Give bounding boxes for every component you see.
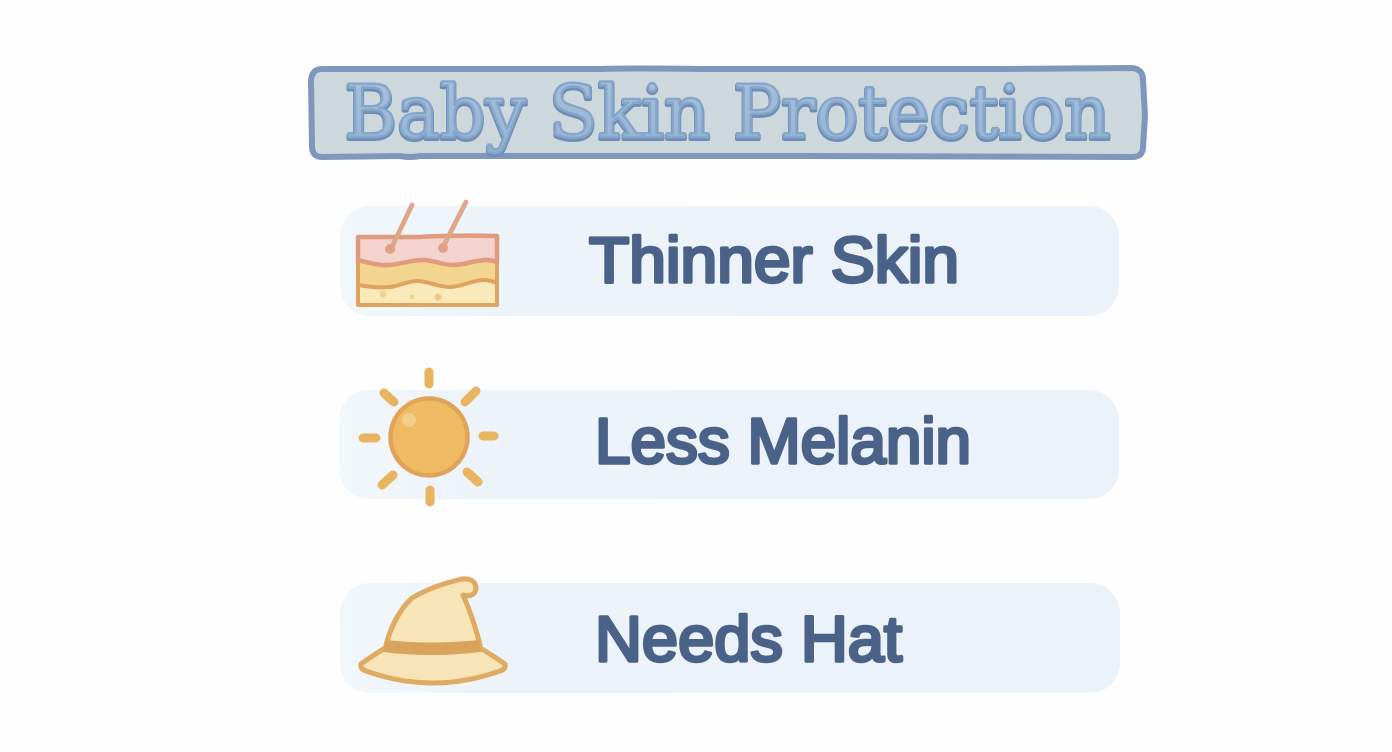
icon: hat xyxy=(361,579,505,683)
label: Thinner Skin xyxy=(589,224,959,296)
title text: Baby Skin Protection xyxy=(344,72,1110,157)
row background xyxy=(339,390,1119,499)
label: Less Melanin xyxy=(595,405,971,477)
label: Needs Hat xyxy=(595,603,902,675)
row background xyxy=(340,583,1120,693)
title banner xyxy=(311,68,1145,157)
panel: thinner skin xyxy=(340,202,1119,316)
panel: needs hat xyxy=(340,579,1120,693)
title text: Baby Skin Protection xyxy=(344,70,1110,155)
icon: sun xyxy=(363,372,494,502)
banner box xyxy=(311,68,1145,157)
panel: less melanin xyxy=(339,372,1119,502)
icon: skin layers xyxy=(358,202,497,305)
row background xyxy=(340,206,1119,316)
